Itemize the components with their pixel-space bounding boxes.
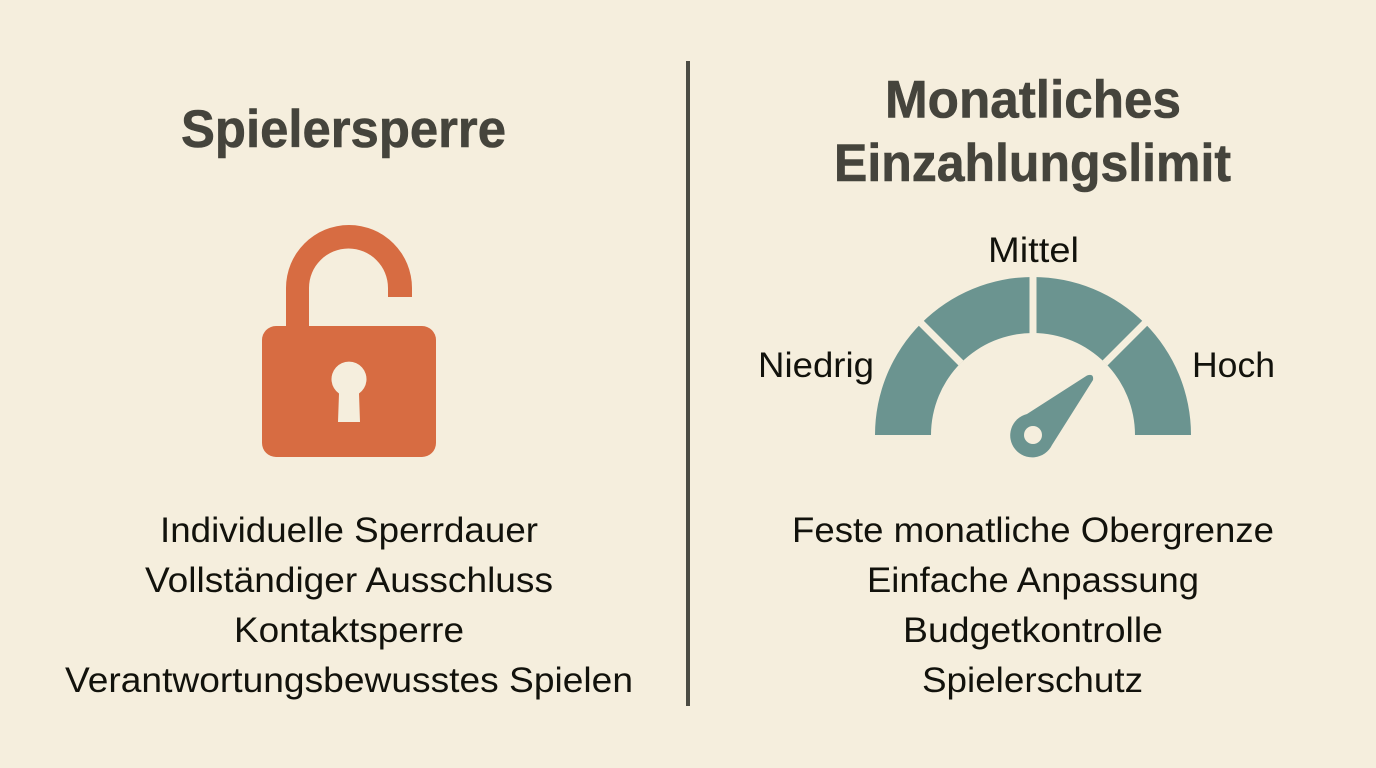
icon: open padlock [262,225,436,457]
feature list: Einzahlungslimit: Feste monatliche Obergrenze [792,510,1274,550]
feature list: Spielersperre: Vollständiger Ausschluss [145,560,553,600]
feature list: Spielersperre [65,510,633,700]
panel: Monatliches Einzahlungslimit [758,70,1275,700]
panel: Spielersperre [65,100,633,700]
feature list: Einzahlungslimit: Budgetkontrolle [903,610,1163,650]
gauge scale label: Hoch: Hoch [1192,345,1275,385]
gauge segments [875,270,1191,435]
heading: Monatliches Einzahlungslimit: Monatliches [885,70,1181,130]
feature list: Spielersperre: Kontaktsperre [234,610,464,650]
feature list: Spielersperre: Verantwortungsbewusstes Spielen [65,660,633,700]
center divider [686,61,690,706]
gauge scale label: Mittel: Mittel [988,230,1079,270]
feature list: Einzahlungslimit: Einfache Anpassung [867,560,1199,600]
feature list: Einzahlungslimit [792,510,1274,700]
feature list: Spielersperre: Individuelle Sperrdauer [160,510,538,550]
gauge needle [1010,375,1093,457]
chart: gauge [758,230,1275,457]
heading: Monatliches Einzahlungslimit: Einzahlungslimit [834,134,1231,193]
heading: Monatliches Einzahlungslimit [834,70,1231,193]
heading: Spielersperre: Spielersperre [181,100,506,159]
feature list: Einzahlungslimit: Spielerschutz [922,660,1143,700]
gauge scale label: Niedrig: Niedrig [758,345,874,385]
